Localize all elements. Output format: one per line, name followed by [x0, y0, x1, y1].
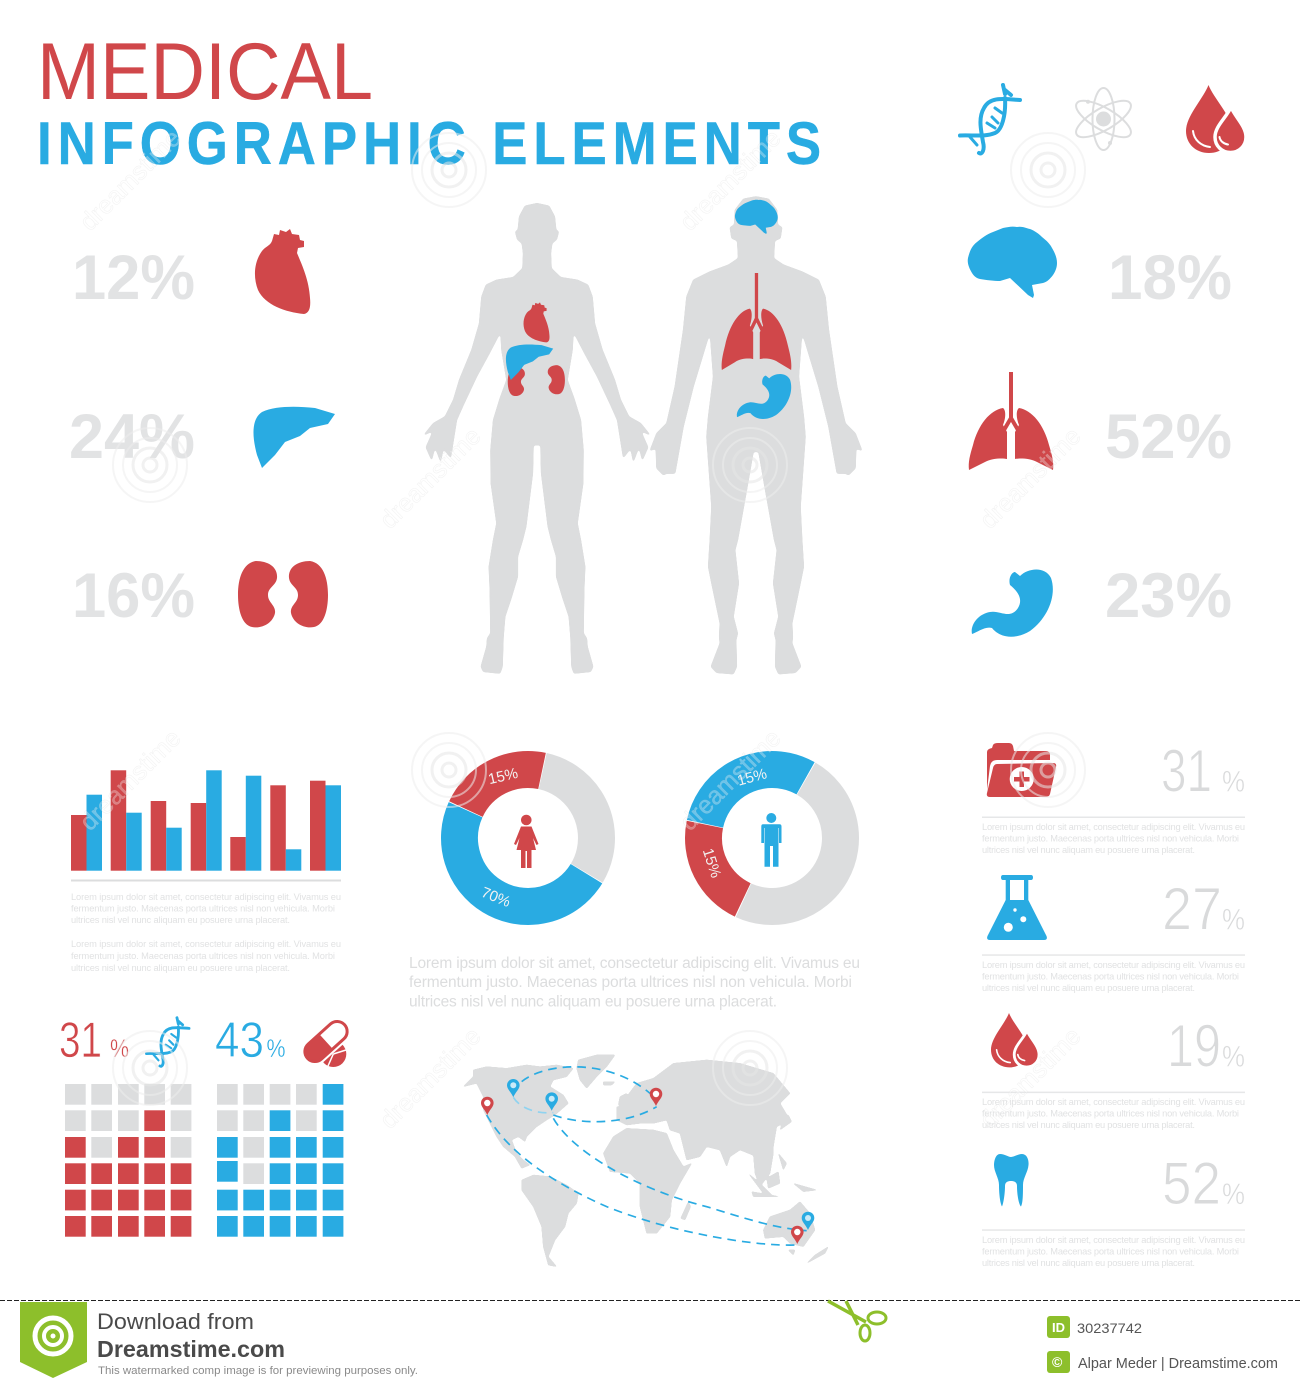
text block: bar chart captions: ultrices nisl vel nunc aliquam eu posuere urna placerat. [71, 915, 290, 925]
organ: brain [735, 200, 778, 234]
watermark overlay: dreamstime [74, 124, 187, 236]
stat: kidneys 16%: 16% [72, 561, 195, 631]
woman silhouette [424, 203, 650, 673]
world map with routes [463, 1055, 828, 1267]
caption: fermentum justo. Maecenas porta ultrices nisl non vehicula. Morbi [982, 1108, 1239, 1118]
stat: 31%: 31 [59, 1012, 102, 1068]
author credit: Alpar Meder | Dreamstime.com [1078, 1355, 1278, 1372]
organ: heart [524, 302, 550, 342]
caption [982, 822, 1245, 855]
stat: 31%: % [1222, 766, 1245, 799]
title line: medical: MEDICAL [37, 27, 373, 117]
figure: man silhouette with organs [650, 197, 862, 674]
caption: fermentum justo. Maecenas porta ultrices nisl non vehicula. Morbi [982, 1246, 1239, 1256]
organ: stomach [737, 374, 791, 419]
stat: brain 18%: 18% [1108, 243, 1232, 313]
footer strip [0, 1300, 1300, 1390]
panel: left organ statistics [69, 229, 335, 631]
caption: Lorem ipsum dolor sit amet, consectetur adipiscing elit. Vivamus eu [982, 960, 1245, 970]
watermark overlay: dreamstime [374, 1022, 487, 1134]
map pins [481, 1079, 814, 1244]
download text: This watermarked comp image is for previewing purposes only. [98, 1365, 418, 1377]
text block: bar chart captions: Lorem ipsum dolor sit amet, consectetur adipiscing elit. Vivamus eu [71, 892, 341, 902]
icon: blood drops [1186, 85, 1246, 153]
caption: Lorem ipsum dolor sit amet, consectetur adipiscing elit. Vivamus eu [982, 1235, 1245, 1245]
icon: kidneys [238, 561, 328, 627]
watermark overlay: dreamstime [674, 124, 787, 236]
rule [982, 1092, 1245, 1093]
text block: centre paragraph: Lorem ipsum dolor sit amet, consectetur adipiscing elit. Vivamus eu [409, 955, 860, 972]
stat: heart 12%: 12% [72, 243, 195, 313]
caption: Lorem ipsum dolor sit amet, consectetur adipiscing elit. Vivamus eu [982, 822, 1245, 832]
stat: 31%: 31 [1161, 738, 1212, 805]
text block: centre paragraph: ultrices nisl vel nunc aliquam eu posuere urna placerat. [409, 994, 777, 1010]
watermark overlay: dreamstime [374, 422, 487, 534]
figure: woman silhouette with organs [424, 203, 650, 673]
panel: right column statistics [982, 738, 1245, 1268]
text block: centre paragraph [409, 955, 860, 1010]
rule [982, 1229, 1245, 1231]
caption [982, 1097, 1245, 1130]
icon: stomach [972, 570, 1053, 637]
stat: 43%: 43 [215, 1012, 264, 1068]
stat: lungs 52%: 52% [1105, 402, 1232, 472]
icon: heart [255, 229, 310, 314]
ribbon logo [20, 1302, 87, 1378]
stat: 43%: % [266, 1035, 286, 1063]
text block: bar chart captions: fermentum justo. Maecenas porta ultrices nisl non vehicula. Morbi [71, 904, 335, 914]
cut line [0, 1300, 1300, 1302]
text block: bar chart captions [71, 892, 341, 973]
waffle grid: blue [217, 1084, 343, 1237]
text block: centre paragraph: fermentum justo. Maecenas porta ultrices nisl non vehicula. Morbi [409, 974, 852, 991]
title line: infographic elements: INFOGRAPHIC ELEMENTS [37, 110, 821, 177]
icon: blood drops [991, 1013, 1039, 1067]
watermark overlay [74, 124, 1087, 1134]
icon: pill and capsule [299, 1016, 353, 1067]
panel: red waffle statistic [59, 1012, 191, 1237]
caption: fermentum justo. Maecenas porta ultrices nisl non vehicula. Morbi [982, 834, 1239, 844]
title [37, 27, 821, 177]
stat: 31%: % [110, 1035, 129, 1063]
stat: 27%: % [1222, 903, 1245, 936]
download text: Download from [97, 1309, 254, 1334]
watermark overlay: dreamstime [974, 422, 1087, 534]
rule [982, 954, 1245, 956]
stat: stomach 23%: 23% [1105, 561, 1232, 631]
organ: liver [506, 344, 553, 380]
waffle grid: red [65, 1084, 191, 1237]
icon: atom [1071, 88, 1136, 150]
panel: right organ statistics [968, 227, 1232, 637]
stat: 52%: 52 [1162, 1150, 1221, 1217]
continents [463, 1055, 828, 1267]
icon: medical folder [987, 743, 1056, 797]
stat: 19%: % [1222, 1041, 1245, 1074]
organ: lungs [722, 273, 791, 370]
image id: ID [1052, 1320, 1065, 1335]
icon: lungs [969, 372, 1053, 470]
text block: bar chart captions: ultrices nisl vel nunc aliquam eu posuere urna placerat. [71, 963, 290, 973]
label: 15%: 15% [735, 765, 769, 790]
icon: dna [146, 1018, 189, 1066]
icon: woman [514, 815, 538, 868]
stat: liver 24%: 24% [69, 402, 195, 472]
caption: ultrices nisl vel nunc aliquam eu posuere urna placerat. [982, 983, 1195, 993]
icon: dna [960, 85, 1020, 153]
bar chart [71, 770, 341, 882]
author credit: © [1052, 1354, 1063, 1370]
watermark overlay: dreamstime [74, 724, 187, 836]
caption: ultrices nisl vel nunc aliquam eu posuere urna placerat. [982, 1120, 1195, 1130]
man silhouette [650, 197, 862, 674]
text block: bar chart captions: fermentum justo. Maecenas porta ultrices nisl non vehicula. Morbi [71, 951, 335, 961]
watermark overlay: dreamstime [974, 1022, 1087, 1134]
download text [97, 1309, 418, 1377]
image id: 30237742 [1077, 1320, 1142, 1336]
donut chart: male [678, 744, 866, 932]
stat: 52%: % [1222, 1178, 1245, 1211]
icon: man [761, 813, 782, 867]
label: 70%: 70% [479, 884, 513, 911]
icon: tooth [994, 1154, 1029, 1206]
panel: right top icons [960, 85, 1246, 153]
organ: kidneys [508, 365, 565, 396]
caption: Lorem ipsum dolor sit amet, consectetur adipiscing elit. Vivamus eu [982, 1097, 1245, 1107]
routes [487, 1067, 807, 1245]
panel: blue waffle statistic [215, 1012, 353, 1237]
image id [1047, 1316, 1142, 1338]
label: 15%: 15% [487, 765, 520, 788]
donut chart: female [434, 744, 622, 932]
author credit [1047, 1351, 1278, 1373]
icon: liver [253, 407, 335, 468]
rule [982, 816, 1245, 818]
watermark overlay: dreamstime [674, 724, 787, 836]
caption: fermentum justo. Maecenas porta ultrices nisl non vehicula. Morbi [982, 972, 1239, 982]
caption [982, 960, 1245, 993]
text block: bar chart captions: Lorem ipsum dolor sit amet, consectetur adipiscing elit. Vivamus eu [71, 939, 341, 949]
stat: 27%: 27 [1162, 875, 1222, 942]
stat: 19%: 19 [1167, 1013, 1221, 1080]
label: 15% rotated: 15% [699, 846, 724, 880]
icon: scissors [828, 1301, 886, 1341]
caption [982, 1235, 1245, 1268]
caption: ultrices nisl vel nunc aliquam eu posuere urna placerat. [982, 1258, 1195, 1268]
caption: ultrices nisl vel nunc aliquam eu posuere urna placerat. [982, 845, 1195, 855]
download text: Dreamstime.com [97, 1336, 285, 1362]
icon: brain [968, 227, 1057, 298]
icon: flask [987, 875, 1047, 940]
